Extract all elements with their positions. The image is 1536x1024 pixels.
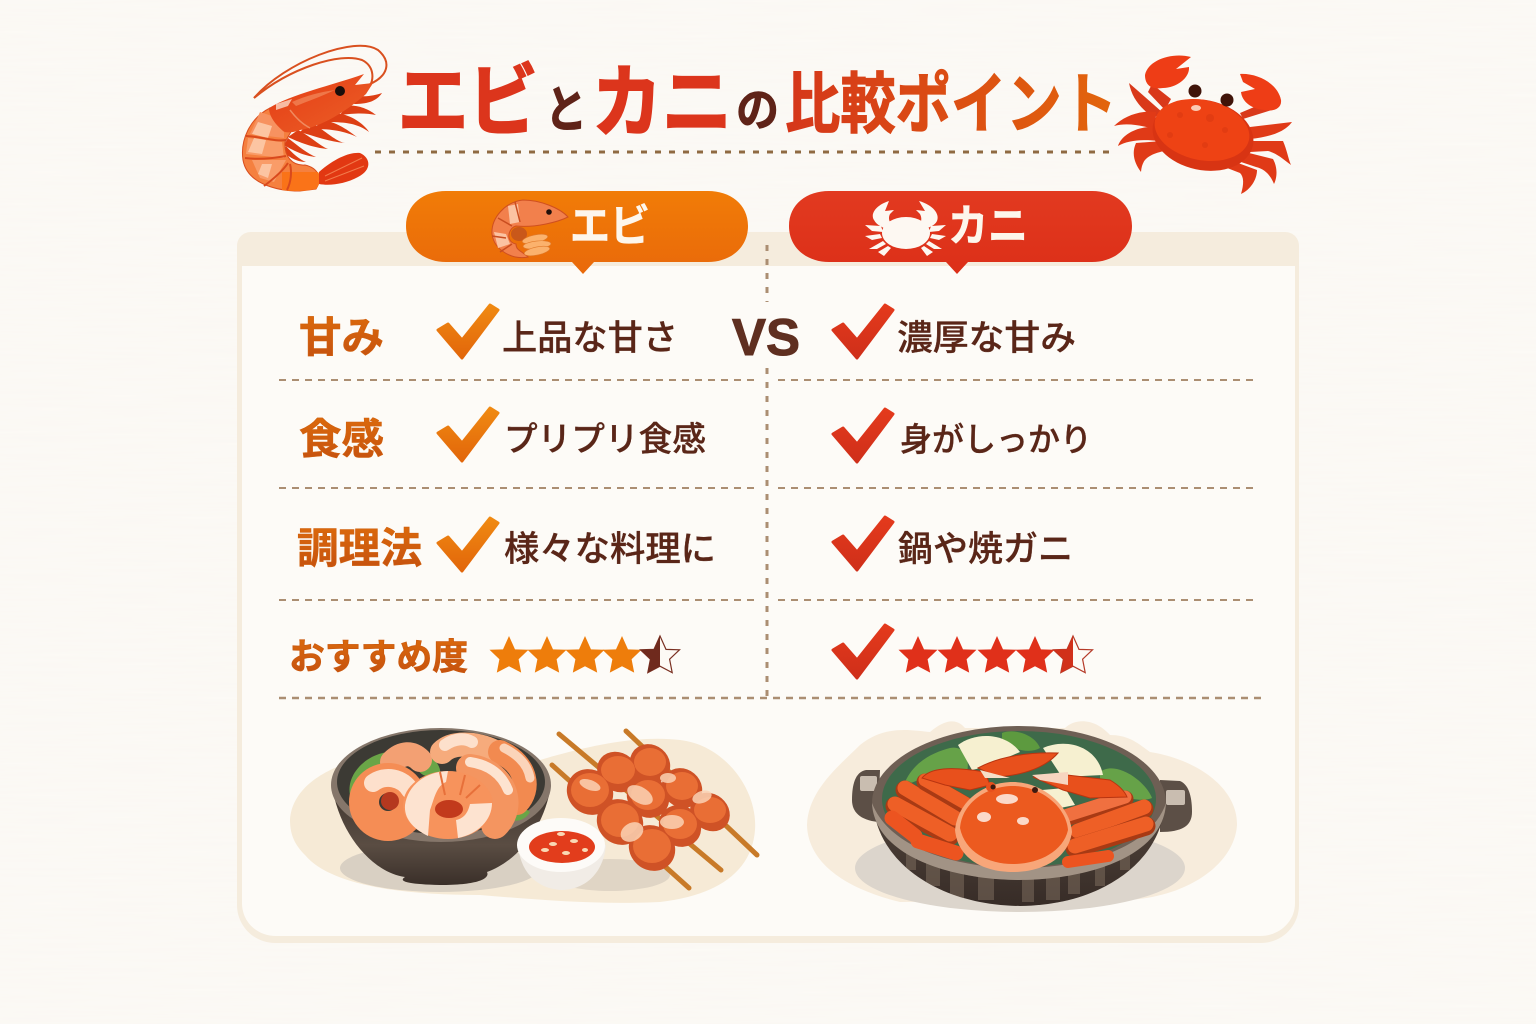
icon: large crab bbox=[1114, 56, 1292, 194]
pan body bbox=[874, 810, 1164, 906]
leaves bbox=[349, 750, 530, 821]
row: sweetness: 濃厚な甘み bbox=[897, 319, 1076, 358]
row: recommendation: おすすめ度 bbox=[289, 636, 468, 677]
shrimp pile bbox=[364, 739, 530, 826]
row: sweetness bbox=[299, 305, 1076, 361]
check bbox=[833, 409, 893, 462]
VS label: VS bbox=[732, 309, 800, 367]
crab claws bbox=[922, 753, 1127, 798]
illustration: shrimp bowl and skewers bbox=[290, 728, 757, 903]
pill header: crab bbox=[789, 191, 1132, 274]
check bbox=[833, 625, 893, 678]
row: texture: プリプリ食感 bbox=[504, 421, 706, 459]
row: cooking method: 鍋や焼ガニ bbox=[898, 530, 1073, 569]
skewers bbox=[552, 731, 757, 888]
vegetables bbox=[905, 731, 1152, 808]
icon: large shrimp bbox=[242, 46, 386, 191]
stars: shrimp bbox=[490, 636, 680, 673]
row: texture: 身がしっかり bbox=[900, 421, 1092, 458]
stars: crab bbox=[898, 636, 1092, 673]
shadow bbox=[855, 824, 1185, 912]
check bbox=[833, 305, 893, 358]
bowl bbox=[331, 728, 551, 885]
pan rim bbox=[872, 726, 1166, 880]
title: と bbox=[545, 82, 587, 138]
title: カニ bbox=[592, 58, 732, 147]
icon: small shrimp bbox=[492, 200, 568, 258]
row: texture: 食感 bbox=[299, 416, 384, 463]
title bbox=[398, 57, 1117, 147]
shadow bbox=[340, 844, 540, 892]
row: cooking method bbox=[297, 517, 1073, 572]
row: cooking method: 様々な料理に bbox=[504, 530, 716, 569]
row: cooking method: 調理法 bbox=[297, 525, 422, 572]
title: の bbox=[736, 84, 779, 136]
pan handles bbox=[852, 770, 1192, 832]
pill header: crab: カニ bbox=[948, 202, 1028, 251]
pill header: shrimp bbox=[406, 191, 748, 274]
sauce cup bbox=[517, 818, 606, 890]
crab legs in pot bbox=[892, 780, 1146, 862]
row: recommendation bbox=[289, 625, 1092, 678]
illustration: crab hot pot bbox=[807, 721, 1237, 912]
icon: white crab bbox=[865, 201, 946, 256]
panel: comparison table frame bbox=[237, 232, 1299, 943]
row: sweetness: 上品な甘さ bbox=[502, 319, 678, 358]
background wash bbox=[290, 739, 755, 903]
title: 比較ポイント bbox=[785, 67, 1117, 141]
background wash bbox=[807, 721, 1237, 902]
check bbox=[438, 305, 498, 358]
crab shell bbox=[955, 782, 1072, 872]
pill header: shrimp: エビ bbox=[570, 202, 650, 251]
check bbox=[438, 408, 498, 461]
title: エビ bbox=[398, 57, 538, 146]
row: texture bbox=[299, 408, 1092, 463]
table dividers bbox=[279, 245, 1262, 698]
row: sweetness: 甘み bbox=[299, 314, 384, 361]
check bbox=[833, 517, 893, 570]
check bbox=[438, 518, 498, 571]
